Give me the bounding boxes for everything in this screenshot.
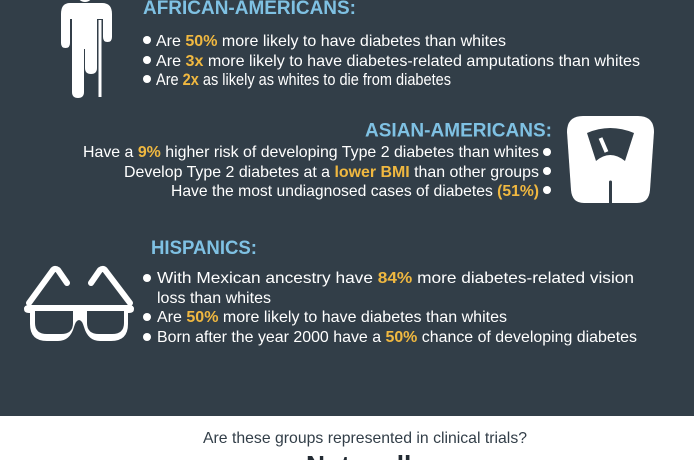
icon: person with cane <box>61 0 112 98</box>
list: Hispanic facts: loss than whites <box>157 290 271 307</box>
list: Hispanic facts <box>143 270 637 346</box>
footer panel <box>0 416 694 460</box>
list: African-American facts: Are 50% more likely to have diabetes than whites <box>156 33 506 50</box>
list: Asian-American facts: Have a 9% higher risk of developing Type 2 diabetes than whites <box>83 144 539 161</box>
list: Hispanic facts: Are 50% more likely to have diabetes than whites <box>157 309 507 326</box>
list: Asian-American facts: Have the most undiagnosed cases of diabetes (51%) <box>171 183 539 200</box>
list: Asian-American facts <box>83 144 551 200</box>
icon: glasses <box>24 269 134 341</box>
footer question: Are these groups represented in clinical trials? <box>203 430 527 447</box>
list: African-American facts: Are 3x more likely to have diabetes-related amputations than whites <box>156 53 640 70</box>
heading: Hispanics: HISPANICS: <box>151 238 257 259</box>
list: Asian-American facts: Develop Type 2 diabetes at a lower BMI than other groups <box>124 164 539 181</box>
heading: Asian-Americans: ASIAN-AMERICANS: <box>365 120 552 142</box>
list: African-American facts: Are 2x as likely as whites to die from diabetes <box>156 71 451 89</box>
icon: bathroom scale <box>567 116 654 203</box>
list: African-American facts <box>143 33 640 89</box>
list: Hispanic facts: With Mexican ancestry have 84% more diabetes-related vision <box>157 270 634 287</box>
list: Hispanic facts: Born after the year 2000 have a 50% chance of developing diabetes <box>157 329 637 346</box>
